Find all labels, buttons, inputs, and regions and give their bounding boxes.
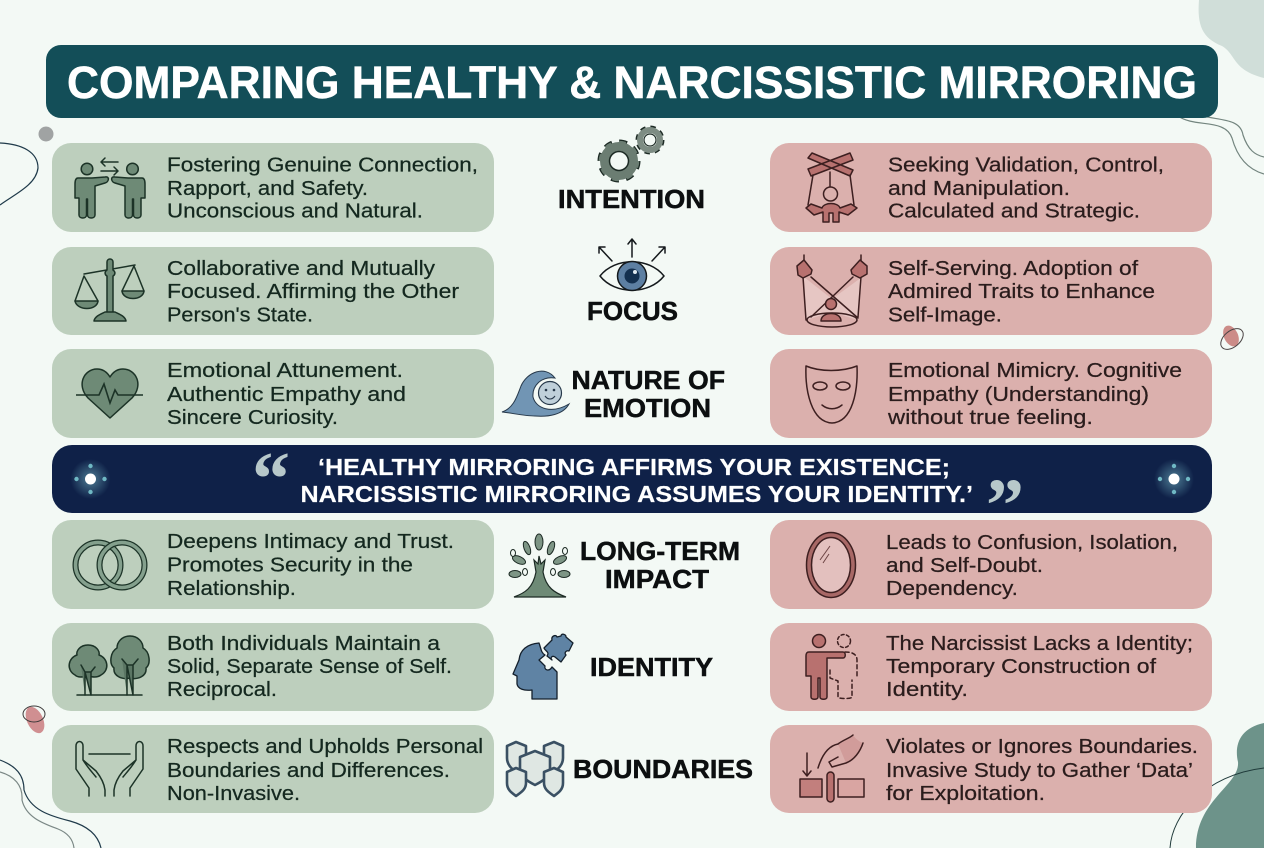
icon: theatre mask [806,366,857,423]
text block: Self-Serving. Adoption of [888,257,1138,280]
text block [886,531,1178,600]
text block: Fostering Genuine Connection, [167,154,478,176]
icon: growing tree [509,534,570,597]
icon: balance scale [75,259,144,321]
text block: Admired Traits to Enhance [888,280,1155,303]
icon: person and dashed outline [806,634,857,699]
panel: narcissistic identity [770,623,1212,711]
icon: two people connecting [75,158,145,218]
label: focus: FOCUS [587,296,678,326]
icon: wave with smiling face [502,371,569,416]
text block [167,154,478,222]
text block: Identity. [886,678,968,701]
text block: Boundaries and Differences. [167,759,450,782]
text block: Respects and Upholds Personal [167,735,483,758]
text block [886,735,1198,805]
icon: hand pushing through barrier [800,735,864,802]
text block [167,632,452,701]
icon: open hands with boundary [76,742,143,796]
label: identity: IDENTITY [590,652,713,682]
label: boundaries: BOUNDARIES [573,754,753,784]
text block: Violates or Ignores Boundaries. [886,735,1198,758]
text block: Sincere Curiosity. [167,406,338,429]
icon: interlocking rings [76,542,144,588]
label: identity [513,634,713,699]
label: nature of emotion [502,365,725,423]
panel: healthy identity [52,623,494,711]
icon: left sparkle [70,459,110,499]
quote banner [52,437,1212,548]
text block: Deepens Intimacy and Trust. [167,530,454,553]
text block: Focused. Affirming the Other [167,280,459,303]
text block: Leads to Confusion, Isolation, [886,531,1178,554]
quote banner: NARCISSISTIC MIRRORING ASSUMES YOUR IDENTITY.’ [300,481,973,507]
quote banner: ‘HEALTHY MIRRORING AFFIRMS YOUR EXISTENCE; [318,454,950,480]
text block [167,359,406,429]
text block: Relationship. [167,577,296,600]
text block: The Narcissist Lacks a Identity; [886,632,1193,655]
text block: Temporary Construction of [886,655,1156,678]
text block: Emotional Mimicry. Cognitive [888,359,1182,382]
icon: overlapping shields [507,742,563,796]
label: intention: INTENTION [558,184,705,214]
text block [886,632,1193,701]
panel: healthy focus [52,247,494,335]
quote banner: “ [252,437,290,521]
text block: without true feeling. [887,406,1093,429]
text block [167,735,483,805]
text block: Authentic Empathy and [167,383,406,406]
label: long-term impact: LONG-TERM [580,536,740,566]
icon: puppet on strings [806,153,857,222]
text block: Empathy (Understanding) [888,383,1149,406]
quote banner: ” [986,464,1024,548]
title: COMPARING HEALTHY & NARCISSISTIC MIRRORING [67,57,1197,108]
label: long-term impact: IMPACT [605,564,709,594]
text block: and Manipulation. [888,177,1070,200]
text block [887,359,1182,429]
text block [167,530,454,600]
text block: Person's State. [167,304,313,326]
label: nature of emotion: EMOTION [584,393,711,423]
icon: two separate trees [69,636,149,695]
icon: eye with arrows [599,239,665,290]
text block: Promotes Security in the [167,554,413,576]
label: focus [587,239,678,326]
label: long-term impact [509,534,740,597]
text block: Emotional Attunement. [167,359,403,382]
text block: Invasive Study to Gather ‘Data’ [886,759,1193,782]
panel: healthy boundaries [52,725,494,813]
icon: head with puzzle piece [513,634,573,699]
text block: Collaborative and Mutually [167,257,436,280]
text block: for Exploitation. [886,782,1045,805]
panel: narcissistic focus [770,247,1212,335]
text block [888,154,1164,222]
label: nature of emotion: NATURE OF [572,365,725,395]
panel: narcissistic impact [770,520,1212,609]
panel: narcissistic emotion [770,349,1212,438]
text block: Non-Invasive. [167,782,300,805]
text block: Reciprocal. [167,678,277,701]
text block: and Self-Doubt. [886,554,1043,577]
icon: gears [602,129,661,178]
panel: healthy impact [52,520,494,609]
label: intention [558,129,705,214]
text block: Both Individuals Maintain a [167,632,441,655]
panel: narcissistic boundaries [770,725,1212,813]
text block: Dependency. [886,577,1018,600]
text block: Seeking Validation, Control, [888,154,1164,176]
text block: Rapport, and Safety. [167,177,368,200]
panel: healthy intention [52,143,494,232]
icon: oval mirror [806,532,856,598]
text block [888,257,1155,326]
text block: Unconscious and Natural. [167,200,423,222]
icon: right sparkle [1154,459,1194,499]
text block: Solid, Separate Sense of Self. [167,655,452,678]
text block [167,257,459,326]
text block: Self-Image. [888,304,1002,326]
icon: heart with pulse [76,369,143,418]
icon: spotlights on person [797,255,867,327]
panel: narcissistic intention [770,143,1212,232]
title [46,45,1218,118]
panel: healthy emotion [52,349,494,438]
label: boundaries [507,742,753,796]
text block: Calculated and Strategic. [888,200,1140,222]
